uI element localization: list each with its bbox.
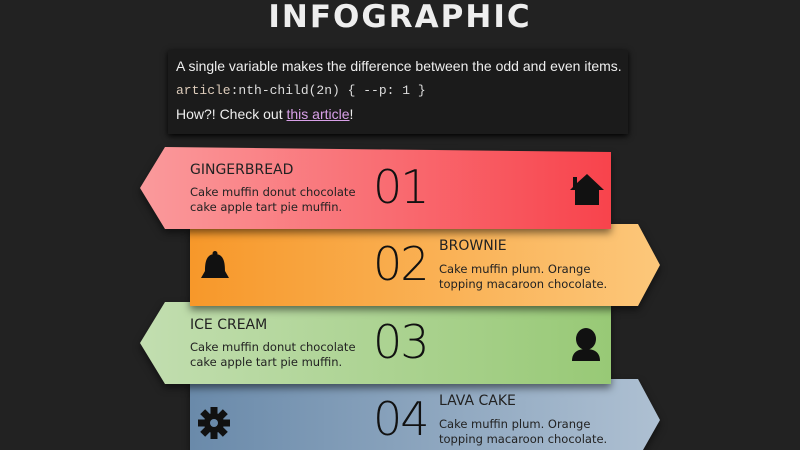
description: Cake muffin plum. Orange: [439, 262, 590, 276]
icon: person: [572, 328, 600, 361]
description: [439, 417, 607, 446]
code line: article:nth-child(2n) { --p: 1 }: [176, 83, 426, 98]
number: 03: [373, 315, 428, 369]
description: cake apple tart pie muffin.: [190, 200, 342, 214]
description: Cake muffin donut chocolate: [190, 340, 356, 354]
description: Cake muffin plum. Orange: [439, 417, 590, 431]
card 1: gingerbread: [140, 147, 617, 239]
card 3: ice cream: [140, 302, 616, 394]
card 4: lava cake: [190, 379, 660, 450]
description: [190, 340, 356, 369]
icon: gear: [198, 407, 230, 439]
description: topping macaroon chocolate.: [439, 277, 607, 291]
description: topping macaroon chocolate.: [439, 432, 607, 446]
card 2: brownie: [184, 224, 660, 316]
description: [190, 185, 356, 214]
number: 02: [373, 237, 428, 291]
description: [439, 262, 607, 291]
description: cake apple tart pie muffin.: [190, 355, 342, 369]
icon: bell: [201, 251, 229, 278]
heading: LAVA CAKE: [439, 393, 516, 409]
code box: [168, 50, 628, 134]
heading: ICE CREAM: [190, 317, 267, 333]
icon: house: [570, 174, 604, 205]
number: 01: [373, 160, 428, 214]
title: INFOGRAPHIC: [268, 0, 532, 35]
heading: BROWNIE: [439, 238, 507, 254]
intro text: A single variable makes the difference between the odd and even items.: [176, 58, 622, 74]
heading: GINGERBREAD: [190, 162, 293, 178]
number: 04: [373, 392, 428, 446]
link text: How?! Check out this article!: [176, 106, 353, 122]
description: Cake muffin donut chocolate: [190, 185, 356, 199]
